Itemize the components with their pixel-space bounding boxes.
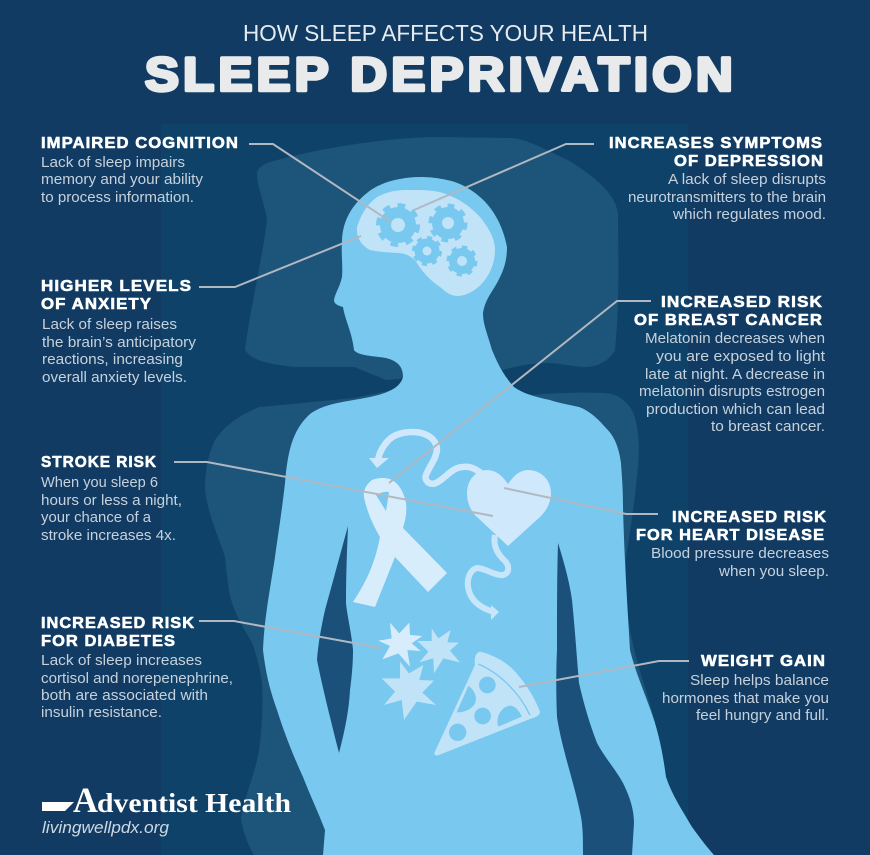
text block: heart disease: FOR HEART DISEASE xyxy=(636,527,825,544)
text block: impaired cognition: Lack of sleep impairs xyxy=(41,155,185,171)
text block: stroke risk: your chance of a xyxy=(41,510,152,526)
text block: anxiety: the brain’s anticipatory xyxy=(42,335,197,351)
text block: breast cancer: INCREASED RISK xyxy=(661,294,823,311)
gear 2 xyxy=(431,206,465,240)
text block: diabetes: insulin resistance. xyxy=(41,705,162,721)
text block: breast cancer: production which can lead xyxy=(646,402,825,418)
gear 1 xyxy=(379,206,417,244)
text block: breast cancer: melatonin disrupts estrogen xyxy=(639,384,825,400)
star 1 xyxy=(378,623,422,667)
text block: weight gain xyxy=(662,653,829,724)
text block: heart disease: Blood pressure decreases xyxy=(651,546,829,562)
text block: weight gain: Sleep helps balance xyxy=(690,673,829,689)
text block: depression: INCREASES SYMPTOMS xyxy=(609,135,823,152)
text block: weight gain: WEIGHT GAIN xyxy=(701,653,826,670)
logo letter A: A xyxy=(73,780,98,820)
icon: breast cancer ribbon xyxy=(353,478,447,607)
icon: heart xyxy=(467,470,551,546)
text block: anxiety: overall anxiety levels. xyxy=(42,370,187,386)
text block: diabetes: INCREASED RISK xyxy=(41,615,195,632)
text block: weight gain: hormones that make you xyxy=(662,691,829,707)
gear 3 xyxy=(414,238,440,264)
person silhouette xyxy=(263,177,714,855)
text block: impaired cognition: to process information. xyxy=(41,190,194,206)
text block: heart disease xyxy=(636,509,829,580)
text block: anxiety xyxy=(41,278,197,386)
text block: diabetes: Lack of sleep increases xyxy=(41,653,202,669)
text block: depression xyxy=(609,135,826,223)
logo: Adventist Health xyxy=(42,780,291,837)
text block: breast cancer: to breast cancer. xyxy=(711,419,825,435)
text block: stroke risk: hours or less a night, xyxy=(41,493,182,509)
text block: heart disease: when you sleep. xyxy=(718,564,829,580)
text block: breast cancer: late at night. A decrease in xyxy=(645,367,825,383)
text block: anxiety: Lack of sleep raises xyxy=(42,317,177,333)
brain xyxy=(357,190,495,296)
text block: stroke risk: STROKE RISK xyxy=(41,454,157,471)
text block: impaired cognition xyxy=(41,135,239,206)
text block: breast cancer: OF BREAST CANCER xyxy=(634,312,823,329)
text block: heart disease: INCREASED RISK xyxy=(672,509,827,526)
right arm gap xyxy=(556,543,634,855)
text block: weight gain: feel hungry and full. xyxy=(696,708,829,724)
text block: depression: OF DEPRESSION xyxy=(674,153,824,170)
arrow: blood flow up xyxy=(369,432,482,484)
text block: stroke risk: When you sleep 6 xyxy=(41,475,158,491)
text block: breast cancer xyxy=(634,294,825,435)
left arm gap xyxy=(317,526,353,753)
logo mark xyxy=(42,802,74,811)
text block: breast cancer: you are exposed to light xyxy=(656,349,825,365)
icon: brain with gears xyxy=(357,190,495,296)
text block: diabetes: FOR DIABETES xyxy=(41,633,176,650)
leader lines xyxy=(174,144,689,687)
text block: diabetes: both are associated with xyxy=(41,688,208,704)
icon: pizza slice xyxy=(434,652,540,756)
pillow shadow xyxy=(245,137,618,380)
text block: diabetes: cortisol and norepenephrine, xyxy=(41,671,233,687)
text block: depression: A lack of sleep disrupts xyxy=(668,172,826,188)
text block: breast cancer: Melatonin decreases when xyxy=(645,331,825,347)
text block: diabetes xyxy=(41,615,233,721)
text block: anxiety: HIGHER LEVELS xyxy=(41,278,192,295)
arrow: blood flow down xyxy=(468,535,508,620)
website: livingwellpdx.org xyxy=(42,818,170,837)
title xyxy=(145,20,737,100)
gear 4 xyxy=(448,248,476,274)
text block: anxiety: reactions, increasing xyxy=(42,352,183,368)
body shadow xyxy=(205,380,655,855)
text block: anxiety: OF ANXIETY xyxy=(41,296,152,313)
icon: blood sugar stars xyxy=(378,623,460,720)
text block: depression: neurotransmitters to the brain xyxy=(628,190,826,206)
star 3 xyxy=(382,662,436,720)
subtitle: HOW SLEEP AFFECTS YOUR HEALTH xyxy=(243,20,648,46)
text block: depression: which regulates mood. xyxy=(672,207,826,223)
main title: SLEEP DEPRIVATION xyxy=(145,47,737,100)
text block: stroke risk xyxy=(41,454,182,544)
text block: impaired cognition: memory and your ability xyxy=(41,172,204,188)
text block: stroke risk: stroke increases 4x. xyxy=(41,528,176,544)
text block: impaired cognition: IMPAIRED COGNITION xyxy=(41,135,239,152)
star 2 xyxy=(417,628,460,673)
logo wordmark: dventist Health xyxy=(97,788,291,818)
